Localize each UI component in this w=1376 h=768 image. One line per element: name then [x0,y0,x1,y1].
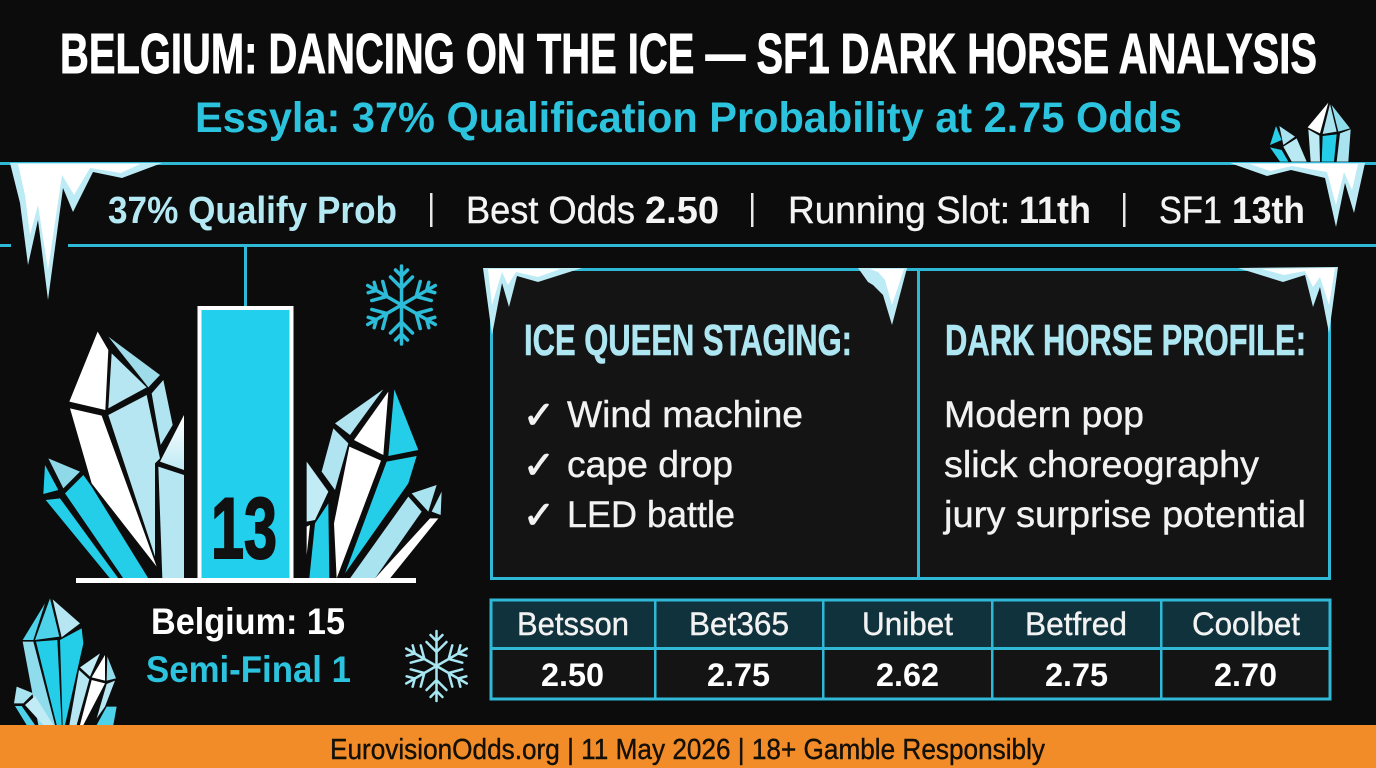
crystals right [307,389,442,578]
profile list [943,394,1306,535]
heading: ice queen staging: ICE QUEEN STAGING: [524,316,852,365]
footer text: EurovisionOdds.org | 11 May 2026 | 18+ Gamble Responsibly [330,734,1045,766]
icon: small crystals top right [1270,103,1351,162]
stat: semi-final rank: SF1 [1159,190,1222,232]
icicles: panel [483,267,1338,335]
stat: best odds: 2.50 [645,190,719,232]
odds table [491,600,1330,699]
staging checklist: ✓ [523,493,555,537]
rank bar [200,308,292,580]
table headers: Bet365 [689,606,789,642]
icon: snowflake cyan [362,266,441,344]
profile list: slick choreography [944,444,1260,485]
table odds values: 2.50 [541,657,604,693]
profile list: Modern pop [944,394,1144,435]
caption: semi-final: Semi-Final 1 [146,649,351,690]
footer bar [0,725,1376,768]
crystals left [43,332,184,578]
stat: running slot: Running Slot: [788,190,1010,232]
subtitle: Essyla: 37% Qualification Probability at 2.75 Odds [195,94,1182,142]
staging checklist: LED battle [567,494,735,535]
table odds values [541,657,1277,693]
table headers: Unibet [862,606,953,642]
staging checklist: ✓ [523,443,555,487]
profile list: jury surprise potential [943,494,1306,535]
stat: semi-final rank: 13th [1232,190,1305,232]
staging checklist: Wind machine [567,394,803,435]
staging checklist: ✓ [523,393,555,437]
staging checklist [523,393,803,537]
table odds values: 2.70 [1214,657,1277,693]
stat: semi-final rank [1159,190,1305,232]
bar value: 13 [211,481,277,577]
caption: Belgium running order: Belgium: 15 [151,601,345,642]
table headers: Betsson [517,606,629,642]
table headers: Coolbet [1192,606,1300,642]
baseline [76,578,416,583]
table odds values: 2.75 [707,657,770,693]
connector line [244,246,247,307]
icicles: top right [1230,163,1365,227]
panel: staging and profile [483,267,1338,578]
main crystal illustration with rank bar [43,246,442,583]
staging checklist: cape drop [567,444,733,485]
icicles: top left [10,163,162,300]
table headers: Betfred [1025,606,1127,642]
stat strip [0,162,1376,247]
stat: best odds: Best Odds [466,190,635,232]
icon: snowflake pale [401,631,472,701]
table odds values: 2.75 [1045,657,1108,693]
table odds values: 2.62 [876,657,939,693]
table headers [517,606,1300,642]
icon: crystal cluster bottom left [14,598,117,725]
stat: running slot: 11th [1019,190,1091,232]
stat: qualify probability: 37% Qualify Prob [108,190,397,232]
